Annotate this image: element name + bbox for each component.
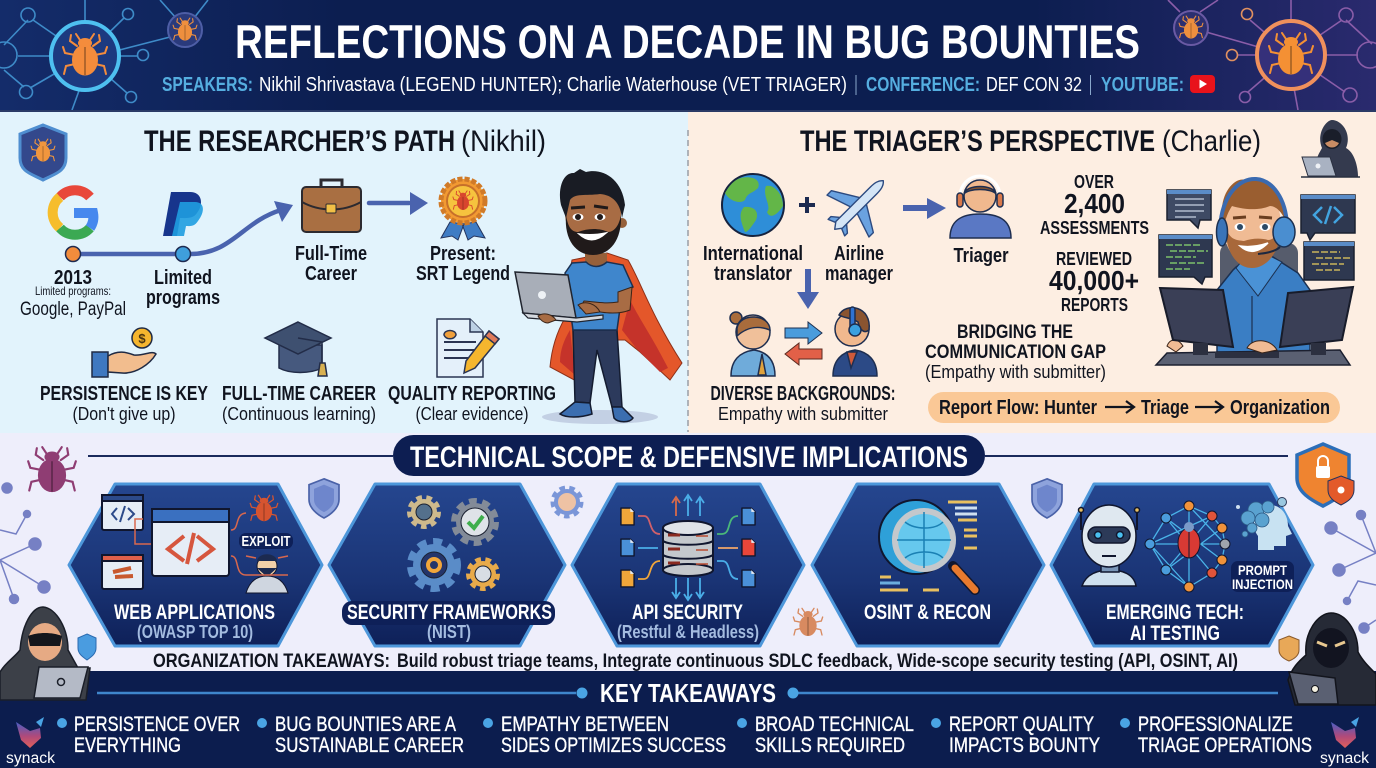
icon: man with headset xyxy=(833,307,877,376)
icon: hand with coin xyxy=(92,328,156,377)
icon: api database xyxy=(621,495,755,600)
panel: api security xyxy=(572,484,804,646)
icon: small orange shield xyxy=(1279,636,1299,661)
panel: the triager's perspective xyxy=(688,110,1376,435)
text: international translator xyxy=(703,243,803,285)
subtitle: speakers, conference, youtube: DEF CON 32 xyxy=(986,73,1082,96)
subtitle: speakers, conference, youtube: Nikhil Shrivastava (LEGEND HUNTER); Charlie Waterhouse (VET TRIAGER) xyxy=(259,73,847,96)
text: airline manager: manager xyxy=(825,263,893,285)
text: quality reporting xyxy=(388,382,556,424)
icon: code windows xyxy=(102,495,246,589)
icon: paypal xyxy=(163,192,203,236)
text: persistence is key xyxy=(40,382,208,424)
takeaway 1 xyxy=(57,713,240,757)
heading: triager's perspective: THE TRIAGER’S PERSPECTIVE xyxy=(800,125,1155,158)
text: bridging the gap xyxy=(925,321,1106,382)
panel: security frameworks xyxy=(329,484,565,646)
takeaway 3: EMPATHY BETWEEN xyxy=(501,713,669,736)
icon: triager headset xyxy=(950,176,1011,238)
icon: masked attacker xyxy=(246,554,288,593)
text: assessments stat: 2,400 xyxy=(1064,188,1125,219)
takeaway 5: IMPACTS BOUNTY xyxy=(949,734,1100,757)
text: $: $ xyxy=(138,331,146,346)
icon: medal xyxy=(441,179,485,240)
text: persistence is key: (Don't give up) xyxy=(72,403,176,424)
text: bridging the gap: BRIDGING THE xyxy=(957,321,1073,343)
subtitle: speakers, conference, youtube: YOUTUBE: xyxy=(1101,73,1184,96)
logo: synack left: synack xyxy=(6,750,55,767)
heading: key takeaways: KEY TAKEAWAYS xyxy=(600,680,776,708)
text: 2013 milestone: Limited programs: xyxy=(35,284,111,298)
icon: magnifier over globe xyxy=(879,500,977,590)
text: full-time career xyxy=(295,243,367,285)
takeaway 2: SUSTAINABLE CAREER xyxy=(275,734,464,757)
icon: left bug network xyxy=(0,0,208,110)
text: security frameworks pill: SECURITY FRAMEWORKS xyxy=(347,601,552,624)
title: REFLECTIONS ON A DECADE IN BUG BOUNTIES xyxy=(235,15,1140,68)
panel: security frameworks: (NIST) xyxy=(427,622,471,642)
icon: orange lock shield xyxy=(1297,444,1354,506)
decoration gear xyxy=(554,489,580,515)
takeaway 3 xyxy=(483,713,726,757)
text: limited programs: Limited xyxy=(154,267,212,289)
panel: key takeaways xyxy=(0,671,1376,768)
takeaway 2: BUG BOUNTIES ARE A xyxy=(275,713,456,736)
panel: emerging tech: AI TESTING xyxy=(1130,622,1220,645)
illustration: hacker bottom right xyxy=(1288,613,1376,705)
takeaway 3: SIDES OPTIMIZES SUCCESS xyxy=(501,734,726,757)
arrow head xyxy=(797,292,819,309)
text: quality reporting: (Clear evidence) xyxy=(416,403,528,424)
text: bridging the gap: COMMUNICATION GAP xyxy=(925,341,1106,363)
arrow: blue exchange xyxy=(785,322,822,344)
takeaway 4 xyxy=(737,713,914,757)
callout: report flow: Triage xyxy=(1141,397,1189,419)
text: present SRT legend: Present: xyxy=(430,243,496,265)
text: 2013 milestone: Google, PayPal xyxy=(20,299,126,320)
text: limited programs xyxy=(146,267,220,309)
decoration: network left xyxy=(0,483,50,604)
icon: plus xyxy=(799,197,815,213)
arrow: down xyxy=(805,269,811,294)
decoration bug xyxy=(793,608,823,636)
subtitle: speakers, conference, youtube: SPEAKERS: xyxy=(162,73,253,96)
takeaway 6 xyxy=(1120,713,1312,757)
callout: report flow: Organization xyxy=(1230,397,1330,419)
heading: technical scope: TECHNICAL SCOPE & DEFENSIVE IMPLICATIONS xyxy=(410,441,968,474)
subtitle: speakers, conference, youtube: CONFERENCE: xyxy=(866,73,980,96)
text: reports stat xyxy=(1049,249,1139,315)
text: prompt injection: PROMPT xyxy=(1238,563,1288,578)
icon: hacker with laptop xyxy=(1301,120,1360,177)
text: full-time career takeaway: (Continuous learning) xyxy=(222,403,376,424)
takeaway 1: EVERYTHING xyxy=(74,734,181,757)
arrow xyxy=(369,201,409,205)
icon: document with pencil xyxy=(437,319,499,377)
icon: graduation cap xyxy=(265,322,331,376)
callout: report flow: Report Flow: Hunter xyxy=(939,397,1097,419)
subtitle: speakers, conference, youtube xyxy=(162,73,1215,96)
text: bridging the gap: (Empathy with submitter) xyxy=(925,362,1106,382)
decoration shield xyxy=(1032,479,1062,518)
illustration: hacker bottom left xyxy=(0,607,90,700)
arrow head xyxy=(410,192,428,215)
text: triager: Triager xyxy=(954,245,1009,267)
icon: gears xyxy=(411,499,496,587)
text: full-time career: Full-Time xyxy=(295,243,367,265)
panel: api security: (Restful & Headless) xyxy=(617,622,759,642)
icon: youtube xyxy=(1190,75,1215,93)
decoration: network right xyxy=(1325,510,1376,633)
illustration: Charlie at monitors xyxy=(1156,178,1355,365)
panel: web applications xyxy=(69,484,322,646)
panel: web applications: WEB APPLICATIONS xyxy=(114,601,275,624)
text: prompt injection xyxy=(1231,561,1294,592)
icon: right bug network xyxy=(1168,0,1376,110)
text: full-time career takeaway: FULL-TIME CAREER xyxy=(222,382,376,405)
callout: report flow xyxy=(928,392,1340,423)
text: quality reporting: QUALITY REPORTING xyxy=(388,382,556,405)
panel: the researcher's path xyxy=(0,110,688,435)
text: international translator: translator xyxy=(714,263,792,285)
text: reports stat: 40,000+ xyxy=(1049,265,1139,296)
heading: researcher's path: (Nikhil) xyxy=(461,125,546,158)
text: full-time career: Career xyxy=(305,263,357,285)
icon: purple bug xyxy=(28,447,76,492)
arrow head xyxy=(927,198,946,219)
arrow xyxy=(903,205,928,211)
takeaway 4: SKILLS REQUIRED xyxy=(755,734,905,757)
panel: web applications: (OWASP TOP 10) xyxy=(137,622,253,642)
logo: synack left xyxy=(6,717,55,767)
takeaway 5: REPORT QUALITY xyxy=(949,713,1094,736)
text: exploit: EXPLOIT xyxy=(242,534,291,550)
text: diverse backgrounds xyxy=(710,382,896,424)
icon: shield with bug xyxy=(20,125,66,180)
text: assessments stat xyxy=(1040,172,1149,238)
text: airline manager: Airline xyxy=(834,243,884,265)
text: organization takeaways: Build robust triage teams, Integrate continuous SDLC feedback, Wide-scope security testing (API, OSINT, AI) xyxy=(397,650,1238,672)
icon: globe xyxy=(722,174,784,236)
icon: google G xyxy=(53,190,93,235)
text: diverse backgrounds: Empathy with submitter xyxy=(718,403,888,424)
logo: synack right xyxy=(1320,717,1369,767)
timeline arrow xyxy=(66,201,293,262)
panel: api security: API SECURITY xyxy=(632,601,743,624)
text: international translator: International xyxy=(703,243,803,265)
logo: synack right: synack xyxy=(1320,750,1369,767)
icon: woman submitter xyxy=(730,312,775,376)
text: airline manager xyxy=(825,243,893,285)
takeaway 4: BROAD TECHNICAL xyxy=(755,713,914,736)
icon: head with brain xyxy=(1236,498,1292,550)
icon: briefcase xyxy=(302,180,361,232)
illustration: Nikhil superhero with laptop xyxy=(515,169,682,424)
text: full-time career takeaway xyxy=(222,382,376,424)
takeaway 2 xyxy=(257,713,464,757)
text: diverse backgrounds: DIVERSE BACKGROUNDS: xyxy=(710,382,896,405)
text: reports stat: REPORTS xyxy=(1061,295,1128,315)
icon: neural net with ladybug xyxy=(1145,501,1230,592)
text: assessments stat: ASSESSMENTS xyxy=(1040,218,1149,238)
icon: airplane xyxy=(814,160,904,250)
takeaway 6: PROFESSIONALIZE xyxy=(1138,713,1293,736)
heading: triager's perspective: (Charlie) xyxy=(1162,125,1261,158)
panel: header banner xyxy=(0,0,1376,110)
text: present SRT legend xyxy=(416,243,510,285)
panel: technical scope xyxy=(0,433,1376,672)
icon: small blue shield xyxy=(78,634,96,660)
text: persistence is key: PERSISTENCE IS KEY xyxy=(40,382,208,405)
text: 2013 milestone: 2013 xyxy=(54,267,92,289)
takeaway 1: PERSISTENCE OVER xyxy=(74,713,240,736)
heading: researcher's path: THE RESEARCHER’S PATH xyxy=(144,125,455,158)
takeaway 5 xyxy=(931,713,1100,757)
panel: osint and recon xyxy=(812,484,1044,646)
text: reports stat: REVIEWED xyxy=(1056,249,1132,269)
heading: technical scope xyxy=(393,435,985,476)
divider xyxy=(687,130,689,432)
text: organization takeaways: ORGANIZATION TAKEAWAYS: xyxy=(153,650,390,672)
text: prompt injection: INJECTION xyxy=(1232,577,1293,592)
takeaway 6: TRIAGE OPERATIONS xyxy=(1138,734,1312,757)
panel: osint and recon: OSINT & RECON xyxy=(864,601,991,624)
text: organization takeaways xyxy=(153,650,1238,672)
decoration icons xyxy=(309,479,339,518)
panel: emerging tech: EMERGING TECH: xyxy=(1106,601,1244,624)
text: assessments stat: OVER xyxy=(1074,172,1114,192)
text: 2013 milestone xyxy=(20,267,126,320)
text: present SRT legend: SRT Legend xyxy=(416,263,510,285)
panel: emerging tech xyxy=(1051,484,1313,646)
arrow: red exchange xyxy=(785,343,822,365)
icon: robot xyxy=(1078,505,1140,586)
text: limited programs: programs xyxy=(146,287,220,309)
